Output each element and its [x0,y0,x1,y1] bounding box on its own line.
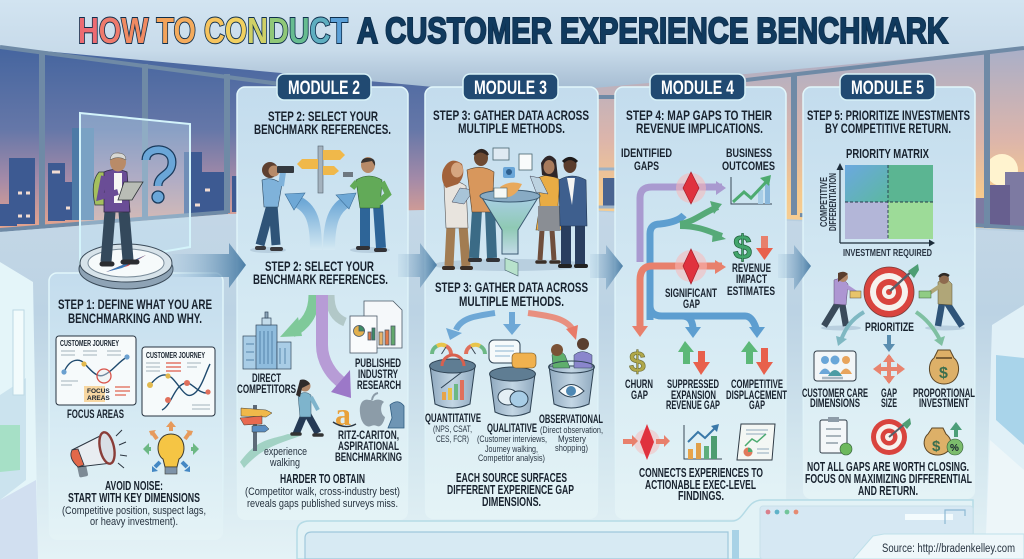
badge: module 4: MODULE 4 [661,78,734,99]
label: identified gaps: IDENTIFIED [621,148,672,160]
text: harder to obtain: reveals gaps published surveys miss. [247,498,398,510]
flow arrow 1 [172,243,246,288]
heading: step 3 repeat: STEP 3: GATHER DATA ACROSS [435,279,588,295]
icon: branching arrows [280,295,351,398]
icon: walking signpost [240,405,272,451]
heading: step 1: STEP 1: DEFINE WHAT YOU ARE [58,296,212,312]
label: quantitative: QUANTITATIVE [425,413,481,425]
label: competitive displacement gap [726,379,787,412]
person: left investor [821,272,861,330]
icon: money bag with percent: % [950,443,959,454]
flow arrow 2 [398,243,437,288]
left furniture [0,262,38,559]
label: significant gap: SIGNIFICANT [665,288,717,300]
text: connects experiences: ACTIONABLE EXEC-LEVEL [645,478,756,492]
panel: module 3 [425,74,603,519]
label: direct competitors: DIRECT [252,373,281,385]
icon: customer team [814,351,856,381]
label: y axis: DIFFERENTIATION [827,173,839,231]
label: prioritize: PRIORITIZE [865,322,914,334]
card: customer journey focus areas: AREAS [87,395,110,402]
console: bottom desk [297,500,973,559]
person: right investor [919,274,965,330]
text: harder to obtain: (Competitor walk, cross-industry best) [245,486,400,498]
icon: gap diamond upper [676,172,706,204]
label: observational: OBSERVATIONAL [539,414,603,426]
city skyline left [0,128,615,226]
text: avoid noise [62,479,206,528]
text: avoid noise: START WITH KEY DIMENSIONS [68,491,200,505]
label: significant gap: GAP [683,299,700,311]
card: customer journey [142,347,215,416]
card: customer journey: CUSTOMER JOURNEY [146,351,205,360]
heading: step 1: BENCHMARKING AND WHY. [68,310,202,326]
icon: money bag: $ [939,365,948,382]
label: churn gap [625,379,653,402]
text: avoid noise: or heavy investment). [90,516,178,528]
person: walking woman [240,380,322,468]
green branches [680,207,722,236]
title: HOW TO CONDUCT [78,10,348,51]
label: observational: shopping) [555,443,588,454]
text: connects experiences: CONNECTS EXPERIENCES TO [639,466,763,480]
label: competitive displacement gap: GAP [749,400,765,412]
icon: megaphone [71,430,127,478]
label: churn gap: GAP [631,390,648,402]
text: each source: DIFFERENT EXPERIENCE GAP [447,483,574,497]
label: customer care dimensions: DIMENSIONS [810,398,860,410]
fork arrowheads [285,193,356,210]
label: quantitative: (NPS, CSAT, [433,424,472,435]
label: observational [539,414,603,454]
heading: step 2 repeat [253,258,388,287]
person: man in blue suit [559,157,587,266]
text: harder to obtain: HARDER TO OBTAIN [280,472,365,486]
label: identified gaps [621,148,672,173]
label: x axis: INVESTMENT REQUIRED [843,247,932,259]
icon: target with arrow [864,264,919,317]
traveller with tablet [93,152,143,264]
label: revenue impact estimates [727,263,775,298]
person: woman with telescope [250,162,294,253]
person: woman in yellow [530,156,562,262]
heading: step 4 [626,107,772,136]
window: left sky [0,47,520,230]
label: ritz-carlton [335,430,402,464]
label: ritz-carlton: RITZ-CARITON, [338,430,399,442]
heading: step 2: BENCHMARK REFERENCES. [254,121,391,137]
label: competitive displacement gap: DISPLACEMENT [726,390,787,402]
badge: module 5: MODULE 5 [851,78,924,99]
heading: step 2 repeat: BENCHMARK REFERENCES. [253,271,388,287]
blue lower flow [650,305,756,328]
label: gap size: SIZE [881,398,897,410]
icon: growth chart [731,175,772,204]
label: qualitative: Competitor analysis) [478,453,545,464]
label: priority matrix: PRIORITY MATRIX [846,146,929,161]
panel: module 1 [49,113,223,540]
icon: three outcome arrows [836,312,945,352]
heading: step 4: REVENUE IMPLICATIONS. [636,120,763,136]
icon: churn dollar: $ [629,346,646,379]
window frames [0,47,1024,230]
heading: step 5 [807,107,970,136]
text: each source: DIMENSIONS. [482,495,541,509]
heading: step 2 [254,108,391,137]
icon: suppressed arrows [678,341,710,375]
heading: step 3 repeat: MULTIPLE METHODS. [459,293,564,309]
panel: module 4 [615,74,787,519]
heading: step 5: BY COMPETITIVE RETURN. [825,120,951,136]
label: proportional investment: INVESTMENT [919,398,969,410]
label: direct competitors: COMPETITORS [237,384,296,396]
text: each source [447,471,574,509]
badge: module 2 [277,74,371,100]
flow arrow 4 [778,245,811,290]
people around funnel [432,150,588,271]
label: business outcomes: OUTCOMES [722,161,775,173]
icon: dollar with down arrow: $ [733,229,752,267]
icon: benchmark brand logos [333,393,404,432]
badge: module 2: MODULE 2 [288,78,360,99]
label: revenue impact estimates: IMPACT [736,274,767,286]
window: right sky [520,48,1024,230]
label: competitive displacement gap: COMPETITIVE [731,379,783,391]
label: proportional investment: PROPORTIONAL [913,388,975,400]
card: customer journey focus areas [56,336,136,405]
city skyline right [975,172,1024,227]
icon: money bag with percent: $ [932,438,941,455]
label: customer care dimensions: CUSTOMER CARE [802,388,868,400]
label: direct competitors [237,373,296,396]
label: published industry research: RESEARCH [357,380,401,392]
label: suppressed expansion revenue gap: SUPPRESSED [667,379,719,391]
heading: step 1 [58,296,212,326]
label: qualitative: (Customer interviews, [477,434,547,445]
icon: diamond with arrows [623,424,670,460]
icon: signpost [297,146,345,193]
icon: research documents [350,301,402,353]
label: ritz-carlton: BENCHMARKING [335,452,402,464]
heading: step 4: STEP 4: MAP GAPS TO THEIR [626,107,772,123]
label: qualitative: QUALITATIVE [487,423,537,435]
label: published industry research: PUBLISHED [355,358,401,370]
person: woman with glasses [442,161,474,268]
label: focus areas: FOCUS AREAS [67,409,124,421]
right furniture [985,305,1024,559]
label: business outcomes: BUSINESS [726,148,772,160]
badge: module 5 [840,74,935,100]
flow arrow 3 [590,245,623,290]
label: published industry research [355,358,401,392]
icon: small target [871,418,911,455]
icon: gap diamond lower [675,249,707,284]
label: revenue impact estimates: ESTIMATES [727,286,775,298]
panel: module 2 [237,74,408,520]
text: not all gaps: AND RETURN. [858,484,918,498]
label: qualitative: Journey walking, [485,444,538,455]
floor [0,208,1024,559]
icon: fork arrows [296,201,348,250]
text: each source: EACH SOURCE SURFACES [456,471,567,485]
icon: benchmark brand logos: a [335,396,351,432]
badge: module 3: MODULE 3 [474,78,547,99]
label: ritz-carlton: ASPIRATIONAL [338,441,399,453]
icon: quantitative bucket [430,345,485,408]
label: quantitative: CES, FCR) [436,434,469,445]
source note [853,534,1024,559]
icon: displacement arrows [741,341,773,375]
text: connects experiences: FINDINGS. [678,489,724,503]
label: churn gap: CHURN [625,379,653,391]
label: significant gap [665,288,717,311]
label: experience walking [264,446,307,469]
card: customer journey focus areas: FOCUS [87,388,110,395]
heading: step 3 repeat [435,279,588,309]
glass panel [80,113,190,266]
icon: office building [243,312,291,369]
label: business outcomes [722,148,775,173]
label: y axis: COMPETITIVE [818,177,830,227]
icon: clipboard [820,417,852,455]
heading: step 2 repeat: STEP 2: SELECT YOUR [265,258,374,274]
card: customer journey focus areas: CUSTOMER JOURNEY [60,339,119,348]
label: y axis [818,173,839,231]
label: revenue impact estimates: REVENUE [732,263,771,275]
label: customer care dimensions [802,388,868,410]
heading: step 2: STEP 2: SELECT YOUR [268,108,378,124]
heading: step 3 [433,107,589,136]
label: gap size: GAP [881,388,897,400]
label: gap size [881,388,897,410]
label: published industry research: INDUSTRY [358,369,398,381]
heading: step 3: MULTIPLE METHODS. [458,120,565,136]
icon: bar chart [684,424,722,459]
label: experience walking: experience [264,446,307,458]
icon: funnel [480,148,540,276]
label: qualitative [477,423,547,464]
heading: step 3: STEP 3: GATHER DATA ACROSS [433,107,589,123]
badge: module 4 [650,74,745,100]
icon: light bulb with arrows [143,421,199,474]
text: avoid noise: (Competitive position, suspect lags, [62,505,206,517]
label: experience walking: walking [269,457,300,469]
icon: observational bucket [548,338,594,408]
red flow [640,266,722,332]
icon: qualitative bucket [489,340,536,416]
icon: dollar with down arrow [733,229,773,267]
text: harder to obtain [245,472,400,510]
label: quantitative [425,413,481,445]
gap flow diagram [632,181,765,338]
sun [986,154,1018,186]
label: observational: Mystery [558,434,586,445]
badge: module 3 [463,74,558,100]
icon: money bag with percent [924,422,963,455]
chart: priority matrix [818,163,935,259]
label: suppressed expansion revenue gap: REVENUE GAP [666,400,720,412]
person: man in orange [467,150,498,260]
text: not all gaps [805,460,972,498]
icon: money bag [929,350,959,384]
label: proportional investment [913,388,975,410]
label: observational: (Direct observation, [540,425,603,436]
icon: report scroll [737,424,775,460]
person: man in green [343,157,390,253]
icon: three method arrows [446,312,578,340]
panel: module 5 [802,74,975,499]
title [78,10,948,51]
icon: question mark [146,150,172,203]
purple flow [640,187,722,262]
label: identified gaps: GAPS [634,161,659,173]
label: suppressed expansion revenue gap [666,379,720,412]
icon: compass [79,244,173,289]
text: connects experiences [639,466,763,503]
blue flow [650,215,684,320]
text: avoid noise: AVOID NOISE: [105,479,163,493]
label: suppressed expansion revenue gap: EXPANSION [671,390,716,402]
icon: expanding arrows [873,354,905,384]
